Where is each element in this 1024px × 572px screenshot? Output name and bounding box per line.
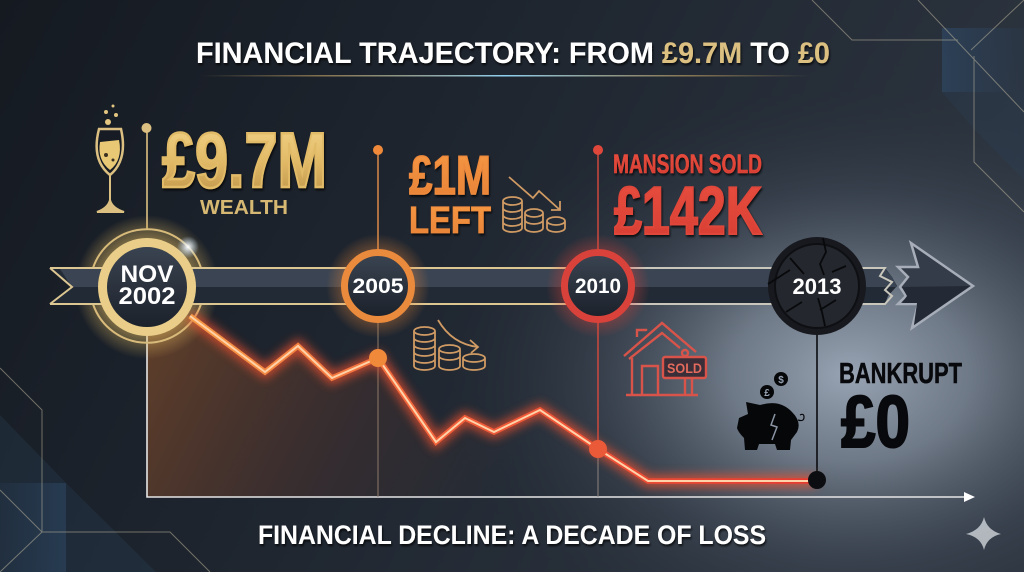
icon: sparkle — [966, 517, 1001, 550]
decline line — [190, 316, 816, 481]
title underline — [200, 75, 810, 76]
icon: coins with zigzag arrow — [503, 177, 565, 232]
value: £9.7M wealth: £9.7M — [162, 116, 327, 204]
value: mansion sold £142K: £142K — [614, 173, 762, 249]
value: mansion sold £142K — [613, 149, 762, 249]
milestone: 2005: 2005 — [352, 275, 404, 298]
value: £1M left — [409, 144, 491, 242]
icon: broken piggy bank: $ — [778, 375, 784, 386]
milestone: 2013 cracked: 2013 — [792, 274, 842, 299]
chart point markers — [369, 349, 826, 489]
icon: coins with curved arrow — [414, 320, 485, 370]
icon: sold house: SOLD — [667, 360, 702, 376]
vertical marker lines — [142, 123, 817, 497]
milestone: 2010 — [546, 234, 650, 338]
milestone: 2005 — [326, 234, 430, 338]
corner decoration: bottom left — [0, 368, 210, 572]
corner decoration: top right — [812, 0, 1024, 212]
chart axes — [147, 320, 975, 502]
icon: champagne glass — [97, 104, 124, 212]
value: mansion sold £142K: MANSION SOLD — [613, 149, 762, 179]
timeline ribbon — [50, 268, 897, 304]
bottom caption: FINANCIAL DECLINE: A DECADE OF LOSS — [258, 520, 766, 550]
milestone: Nov 2002 — [102, 236, 199, 332]
milestone: Nov 2002: 2002 — [118, 283, 176, 310]
value: £9.7M wealth: WEALTH — [200, 197, 288, 219]
value: £9.7M wealth — [162, 116, 327, 219]
value: £1M left: LEFT — [409, 200, 491, 242]
title: FINANCIAL TRAJECTORY: FROM £9.7M TO £0 — [196, 37, 830, 70]
milestone: Nov 2002: NOV — [120, 261, 174, 288]
icon: broken piggy bank: £ — [764, 388, 770, 399]
value: £1M left: £1M — [409, 144, 491, 206]
value: bankrupt £0 — [839, 358, 962, 463]
icon: sold house — [624, 323, 706, 395]
icon: broken piggy bank — [737, 372, 804, 450]
value: bankrupt £0: BANKRUPT — [839, 358, 962, 390]
gold halo and outer ring — [75, 215, 219, 359]
value: bankrupt £0: £0 — [841, 382, 910, 463]
milestone: 2010: 2010 — [575, 275, 621, 298]
broken arrowhead — [898, 243, 973, 328]
chart glow area — [147, 310, 816, 497]
milestone: 2013 cracked — [768, 237, 866, 335]
